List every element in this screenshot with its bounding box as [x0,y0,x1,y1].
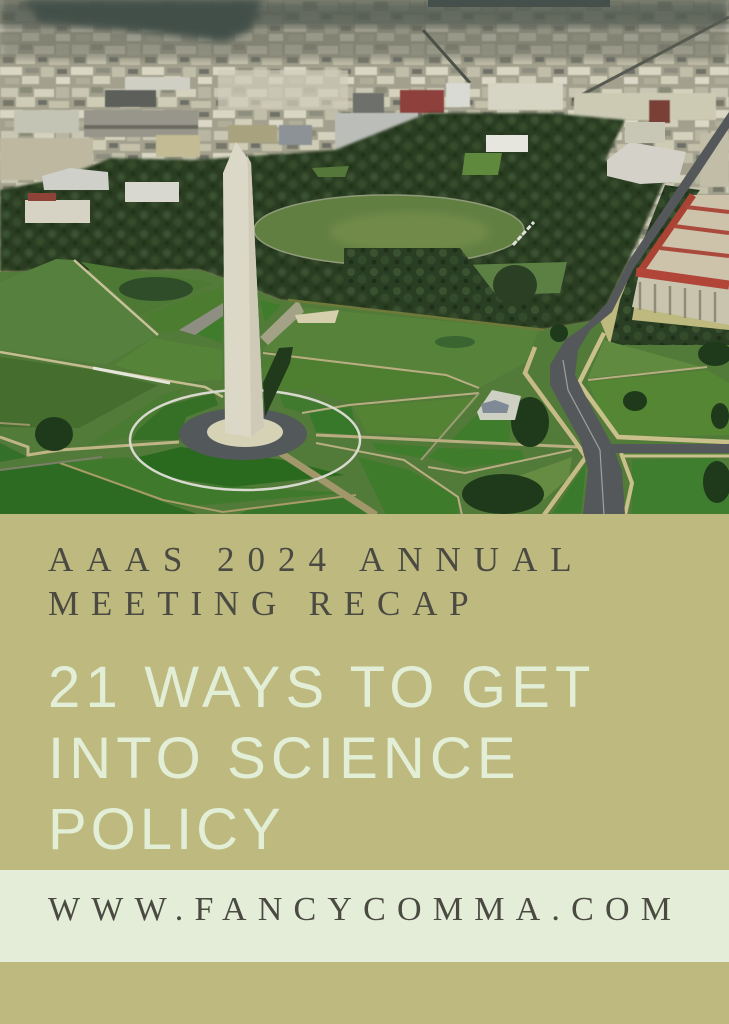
title: 21 ways to get into science policy: 21 WAYS TO GET [48,655,596,720]
title: 21 ways to get into science policy: INTO SCIENCE [48,726,521,791]
road [550,112,729,515]
lawns [0,259,729,515]
footpaths [0,260,729,515]
website band [0,870,729,962]
title: 21 ways to get into science policy [48,655,596,862]
monument shadow [263,347,293,417]
title: 21 ways to get into science policy: POLICY [48,797,285,862]
white buildings among the trees [25,122,686,223]
trees on the mall [35,248,729,514]
heading: meeting recap [48,540,585,623]
right building [632,195,729,325]
website url: WWW.FANCYCOMMA.COM [48,891,682,928]
heading: meeting recap: AAAS 2024 ANNUAL [48,540,585,579]
roads and plazas near the monument [179,300,339,345]
aerial photo of the Washington Monument and National Mall [0,0,729,514]
heading: meeting recap: MEETING RECAP [48,584,480,623]
small white building [477,390,521,420]
monument plaza [130,390,360,490]
Washington Monument obelisk [223,142,264,437]
city background [0,0,729,260]
tree belts [0,113,729,345]
lower lawn base [0,270,729,514]
ellipse lawn [254,195,534,265]
